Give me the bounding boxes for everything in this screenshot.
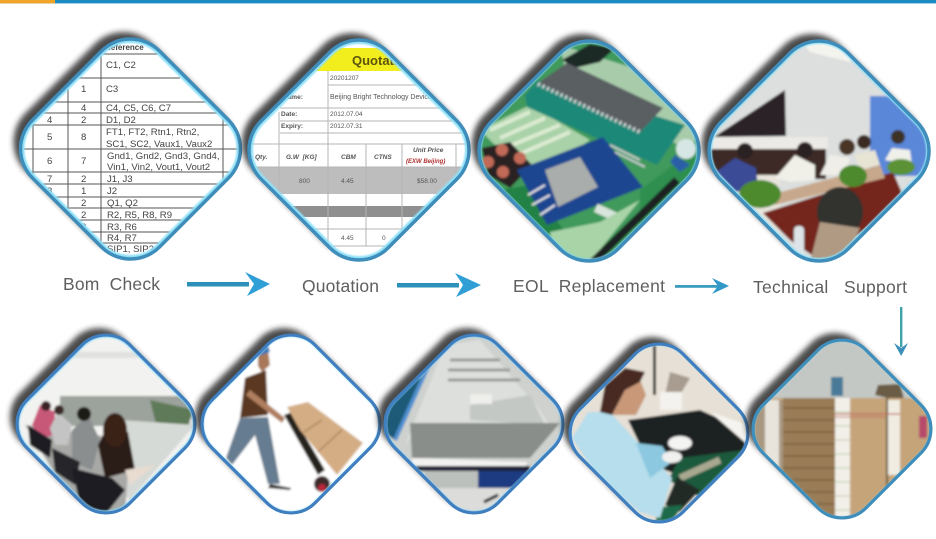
panel: BOM table photo: 2 <box>81 115 86 126</box>
panel: quotation sheet photo: $58.00 <box>417 178 437 185</box>
panel: quotation sheet photo: Quotation <box>352 53 413 68</box>
panel: BOM table photo: 2 <box>81 244 86 255</box>
panel: BOM table photo: C3 <box>106 84 118 95</box>
panel: BOM table photo: J2 <box>107 186 117 197</box>
panel: BOM table photo: R2, R5, R8, R9 <box>107 210 172 221</box>
panel: BOM table photo: SC1, SC2, Vaux1, Vaux2 <box>106 139 212 150</box>
label: Bom Check: Bom Check <box>63 274 160 294</box>
panel: quotation sheet photo: 2012.07.04 <box>330 111 363 118</box>
panel: quotation sheet photo: 4.45 <box>341 178 354 185</box>
panel: BOM table photo: Vin1, Vin2, Vout1, Vout2 <box>107 162 210 173</box>
panel: quotation sheet photo: 0 <box>382 235 386 242</box>
panel: BOM table photo: 4 <box>47 115 53 126</box>
panel: BOM table photo: 1 <box>81 186 86 197</box>
panel: BOM table photo: J1, J3 <box>107 174 133 185</box>
arrow: Quotation to EOL Replacement <box>397 273 481 297</box>
panel: quotation sheet photo: CTNS <box>374 154 392 161</box>
panel: packed cartons photo <box>746 333 936 525</box>
panel: BOM table photo: R3, R6 <box>107 222 137 233</box>
top colour bar <box>0 0 936 3</box>
panel: BOM table photo: 7 <box>81 156 86 167</box>
panel: BOM table photo: Q1, Q2 <box>107 198 138 209</box>
panel: BOM table photo: 8 <box>81 132 86 143</box>
label: Quotation: Quotation <box>302 276 379 296</box>
panel: delivery worker photo <box>195 328 385 520</box>
arrow: EOL Replacement to Technical Support <box>675 278 729 294</box>
panel: quotation sheet photo: Qty. <box>255 154 268 161</box>
panel: office team photo <box>10 328 200 520</box>
panel: BOM table photo: D1, D2 <box>106 115 136 126</box>
panel: BOM table photo: 2 <box>81 233 86 244</box>
panel: BOM table photo: 7 <box>47 174 52 185</box>
arrow: Bom Check to Quotation <box>187 272 270 296</box>
panel: BOM table photo: 2 <box>81 198 86 209</box>
panel: quotation sheet photo: 2012.07.31 <box>330 123 363 130</box>
panel: quotation sheet photo: Expiry: <box>281 123 303 130</box>
panel: quotation sheet photo: (EXW Beijing) <box>406 159 445 165</box>
panel: inspection machine photo <box>378 328 570 520</box>
panel: quotation sheet photo: Beijing Bright Technology Devices <box>330 94 436 101</box>
panel: quotation sheet photo: 800 <box>299 178 310 185</box>
label: EOL Replacement: EOL Replacement <box>513 276 665 296</box>
panel: quotation sheet photo: CBM <box>341 154 356 161</box>
panel: BOM table photo: 2 <box>81 222 86 233</box>
panel: BOM table photo: 5 <box>47 132 52 143</box>
arrow: Technical Support down <box>894 307 908 356</box>
panel: BOM table photo: R4, R7 <box>107 233 137 244</box>
panel: quotation sheet photo: 4.45 <box>341 235 354 242</box>
label: Technical Support: Technical Support <box>753 277 907 297</box>
panel: BOM table photo: FT1, FT2, Rtn1, Rtn2, <box>106 127 199 138</box>
panel: BOM table photo: Gnd1, Gnd2, Gnd3, Gnd4, <box>107 151 220 162</box>
panel: quotation sheet photo: G.W [KG] <box>286 154 318 161</box>
panel: BOM table photo: 2 <box>81 210 86 221</box>
panel: BOM table photo: 4 <box>81 103 87 114</box>
panel: technical meeting photo <box>700 30 936 270</box>
panel: quotation sheet photo: 20201207 <box>330 75 359 82</box>
panel: BOM table photo: 2 <box>81 174 86 185</box>
panel: circuit board photo <box>470 30 710 270</box>
panel: BOM table photo: 8 <box>47 186 52 197</box>
panel: BOM table photo: 6 <box>47 156 52 167</box>
panel: BOM table photo: Reference <box>105 43 144 52</box>
panel: BOM table photo: C4, C5, C6, C7 <box>106 103 171 114</box>
panel: quotation sheet photo: Unit Price <box>413 147 444 154</box>
panel: quotation sheet photo <box>240 30 475 270</box>
panel: BOM table photo: SIP1, SIP2 <box>107 244 154 255</box>
panel: BOM table photo: 1 <box>81 84 86 95</box>
panel: BOM table photo <box>13 30 250 270</box>
panel: quotation sheet photo: Date: <box>281 111 297 118</box>
panel: assembly worker photo <box>563 337 755 530</box>
panel: BOM table photo: C1, C2 <box>106 60 136 71</box>
panel: quotation sheet photo: Name: <box>283 94 303 101</box>
